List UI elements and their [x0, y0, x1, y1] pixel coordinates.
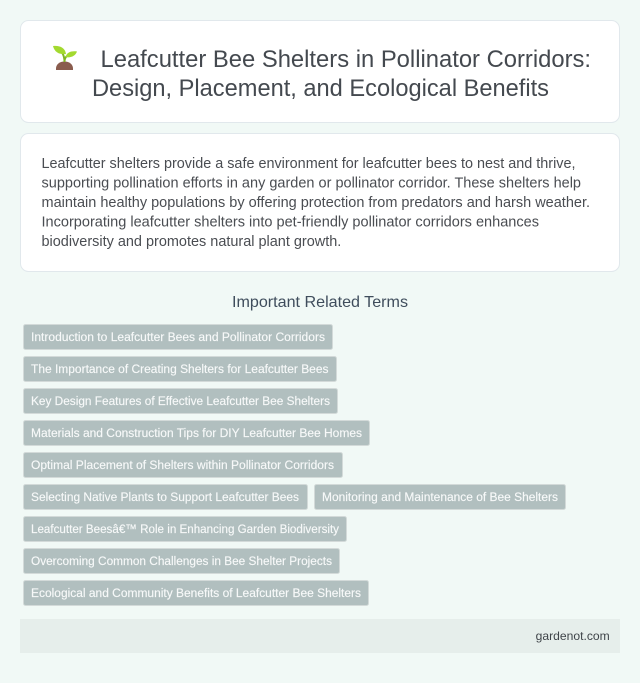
title: Leafcutter Bee Shelters in Pollinator Corridors: — [100, 46, 591, 73]
tag: biodiversity: Leafcutter Beesâ€™ Role in Enhancing Garden Biodiversity — [31, 522, 340, 536]
description text: Incorporating leafcutter shelters into pet-friendly pollinator corridors enhances — [42, 214, 539, 230]
panel: description — [20, 134, 620, 272]
tag: introduction — [24, 324, 332, 350]
tag: importance — [24, 356, 336, 382]
tag: design features — [24, 388, 338, 414]
description text: supporting pollination efforts in any garden or pollinator corridor. These shelters help — [42, 176, 581, 192]
tag: native plants: Selecting Native Plants to Support Leafcutter Bees — [31, 490, 299, 504]
panel: title card — [20, 20, 620, 122]
tag: challenges: Overcoming Common Challenges in Bee Shelter Projects — [31, 554, 332, 568]
tag: biodiversity — [24, 516, 346, 542]
description text — [42, 156, 590, 250]
tag: benefits — [24, 580, 368, 606]
description text: maintain healthy populations by offering protection from predators and harsh weather. — [42, 195, 590, 211]
panel: related terms tags — [24, 324, 566, 606]
source credit: gardenot.com — [536, 629, 610, 643]
title — [92, 46, 591, 102]
tag: materials — [24, 420, 370, 446]
heading: important related terms: Important Related Terms — [232, 294, 408, 311]
description text: biodiversity and promotes natural plant growth. — [42, 234, 341, 250]
tag: monitoring — [314, 484, 566, 510]
tag: benefits: Ecological and Community Benefits of Leafcutter Bee Shelters — [31, 586, 361, 600]
tag: placement: Optimal Placement of Shelters within Pollinator Corridors — [31, 458, 334, 472]
tag: monitoring: Monitoring and Maintenance of Bee Shelters — [322, 490, 558, 504]
tag: introduction: Introduction to Leafcutter Bees and Pollinator Corridors — [31, 330, 325, 344]
tag: materials: Materials and Construction Tips for DIY Leafcutter Bee Homes — [31, 426, 362, 440]
tag: placement — [24, 452, 342, 478]
tag: native plants — [24, 484, 308, 510]
tag: design features: Key Design Features of Effective Leafcutter Bee Shelters — [31, 394, 330, 408]
footer — [20, 619, 620, 653]
tag: challenges — [24, 548, 340, 574]
title: Design, Placement, and Ecological Benefits — [92, 75, 549, 102]
icon: seedling — [53, 46, 77, 70]
description text: Leafcutter shelters provide a safe environment for leafcutter bees to nest and thrive, — [42, 156, 576, 172]
tag: importance: The Importance of Creating Shelters for Leafcutter Bees — [31, 362, 328, 376]
